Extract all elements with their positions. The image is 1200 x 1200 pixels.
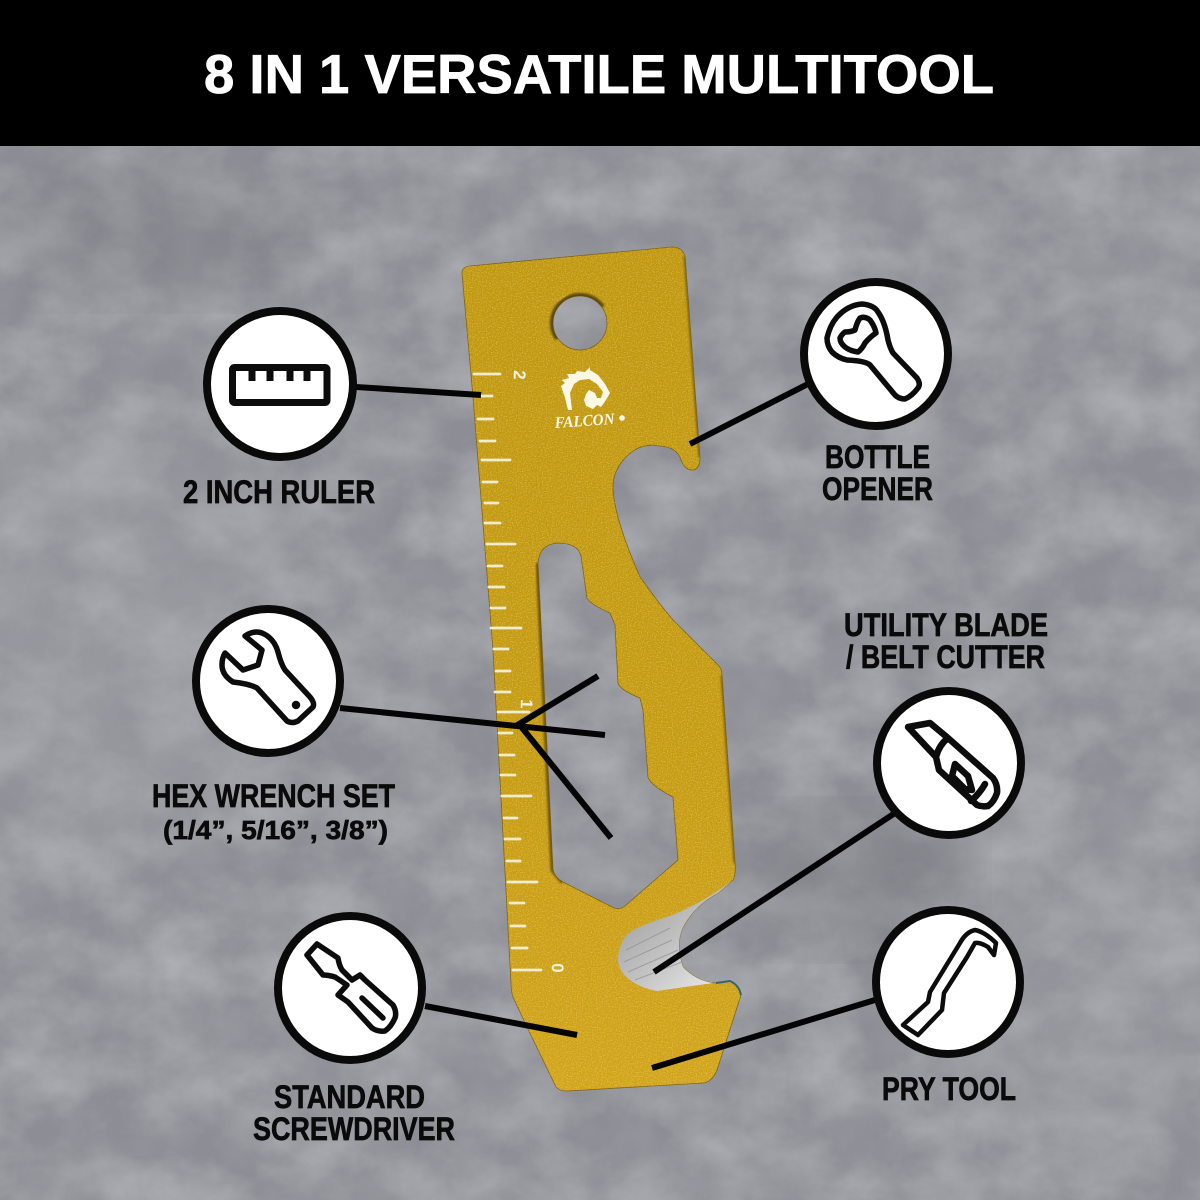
callout: standard screwdriver [253,916,455,1147]
label: utility blade: UTILITY BLADE [844,607,1048,643]
callout: pry tool [876,910,1020,1107]
icon: pry bar [903,930,996,1035]
title: 8 IN 1 VERSATILE MULTITOOL [204,43,994,105]
callout: hex wrench set [152,609,395,845]
label: bottle opener: BOTTLE [825,439,930,475]
label: utility blade: / BELT CUTTER [846,639,1045,675]
tool body [462,247,741,1091]
label: standard screwdriver: SCREWDRIVER [253,1111,455,1147]
leader line: ruler [356,387,481,395]
title banner [0,0,1200,146]
ruler numbers [510,370,567,973]
leader line: blade [654,813,895,972]
callout: bottle opener [804,282,948,507]
label: hex wrench set: HEX WRENCH SET [152,778,395,814]
grain and slot bevels [455,240,750,1100]
label: pry tool: PRY TOOL [882,1071,1016,1107]
blade streaks [624,928,682,980]
ruler numbers: 2 [510,370,529,380]
blade edge [618,880,733,991]
label: bottle opener: OPENER [822,471,933,507]
icon: screwdriver [307,944,396,1031]
ruler numbers: 1 [517,699,536,709]
leader line: pry tool [652,1000,875,1068]
icon: box cutter [908,723,997,806]
callout: 2 inch ruler [183,311,375,510]
label: hex wrench set [152,778,395,845]
label: standard screwdriver: STANDARD [274,1079,425,1115]
label: standard screwdriver [253,1079,455,1147]
leader lines: hex wrench [340,676,611,838]
label: utility blade [844,607,1048,675]
ruler numbers: 0 [548,963,567,973]
multitool [455,240,750,1100]
leader line: bottle opener [690,383,810,444]
blade tip tint [716,981,741,995]
callout: utility blade [844,607,1048,835]
label: ruler: 2 INCH RULER [183,474,375,510]
icon: wrench [222,632,314,722]
falcon wordmark: FALCON [553,411,616,432]
icon: ruler [232,367,327,402]
ruler ticks [474,374,541,970]
label: bottle opener [822,439,933,507]
leader line: screwdriver [425,1006,577,1035]
label: hex wrench set: (1/4”, 5/16”, 3/8”) [163,815,388,845]
icon: bottle opener [827,304,919,399]
falcon logo [553,367,625,432]
